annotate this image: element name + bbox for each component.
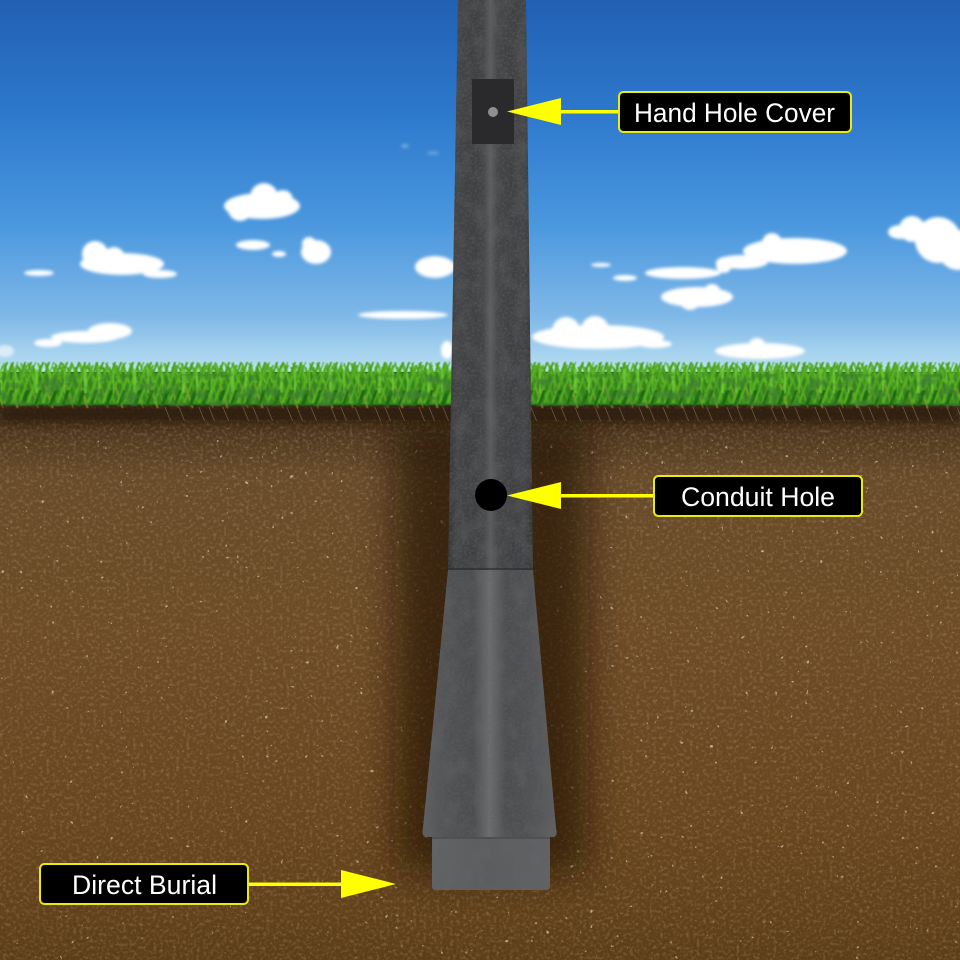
- label: Direct Burial: [40, 864, 248, 904]
- arrow: conduit hole: [507, 482, 654, 509]
- grass roots: [167, 407, 960, 421]
- grass: [0, 370, 960, 406]
- label: Conduit Hole: [654, 476, 862, 516]
- pole: [420, 0, 560, 890]
- label: Conduit Hole: Conduit Hole: [681, 482, 835, 512]
- hand hole cover: [472, 79, 514, 144]
- arrow: direct burial: [248, 870, 396, 898]
- clouds: [0, 144, 960, 359]
- label: Direct Burial: Direct Burial: [72, 870, 217, 900]
- sky background: [0, 0, 960, 372]
- arrow: hand hole cover: [507, 98, 619, 125]
- hand hole bolt: [488, 107, 498, 117]
- soil: [0, 405, 960, 960]
- conduit hole: [475, 479, 507, 511]
- label: Hand Hole Cover: [619, 92, 851, 132]
- label: Hand Hole Cover: Hand Hole Cover: [634, 98, 835, 128]
